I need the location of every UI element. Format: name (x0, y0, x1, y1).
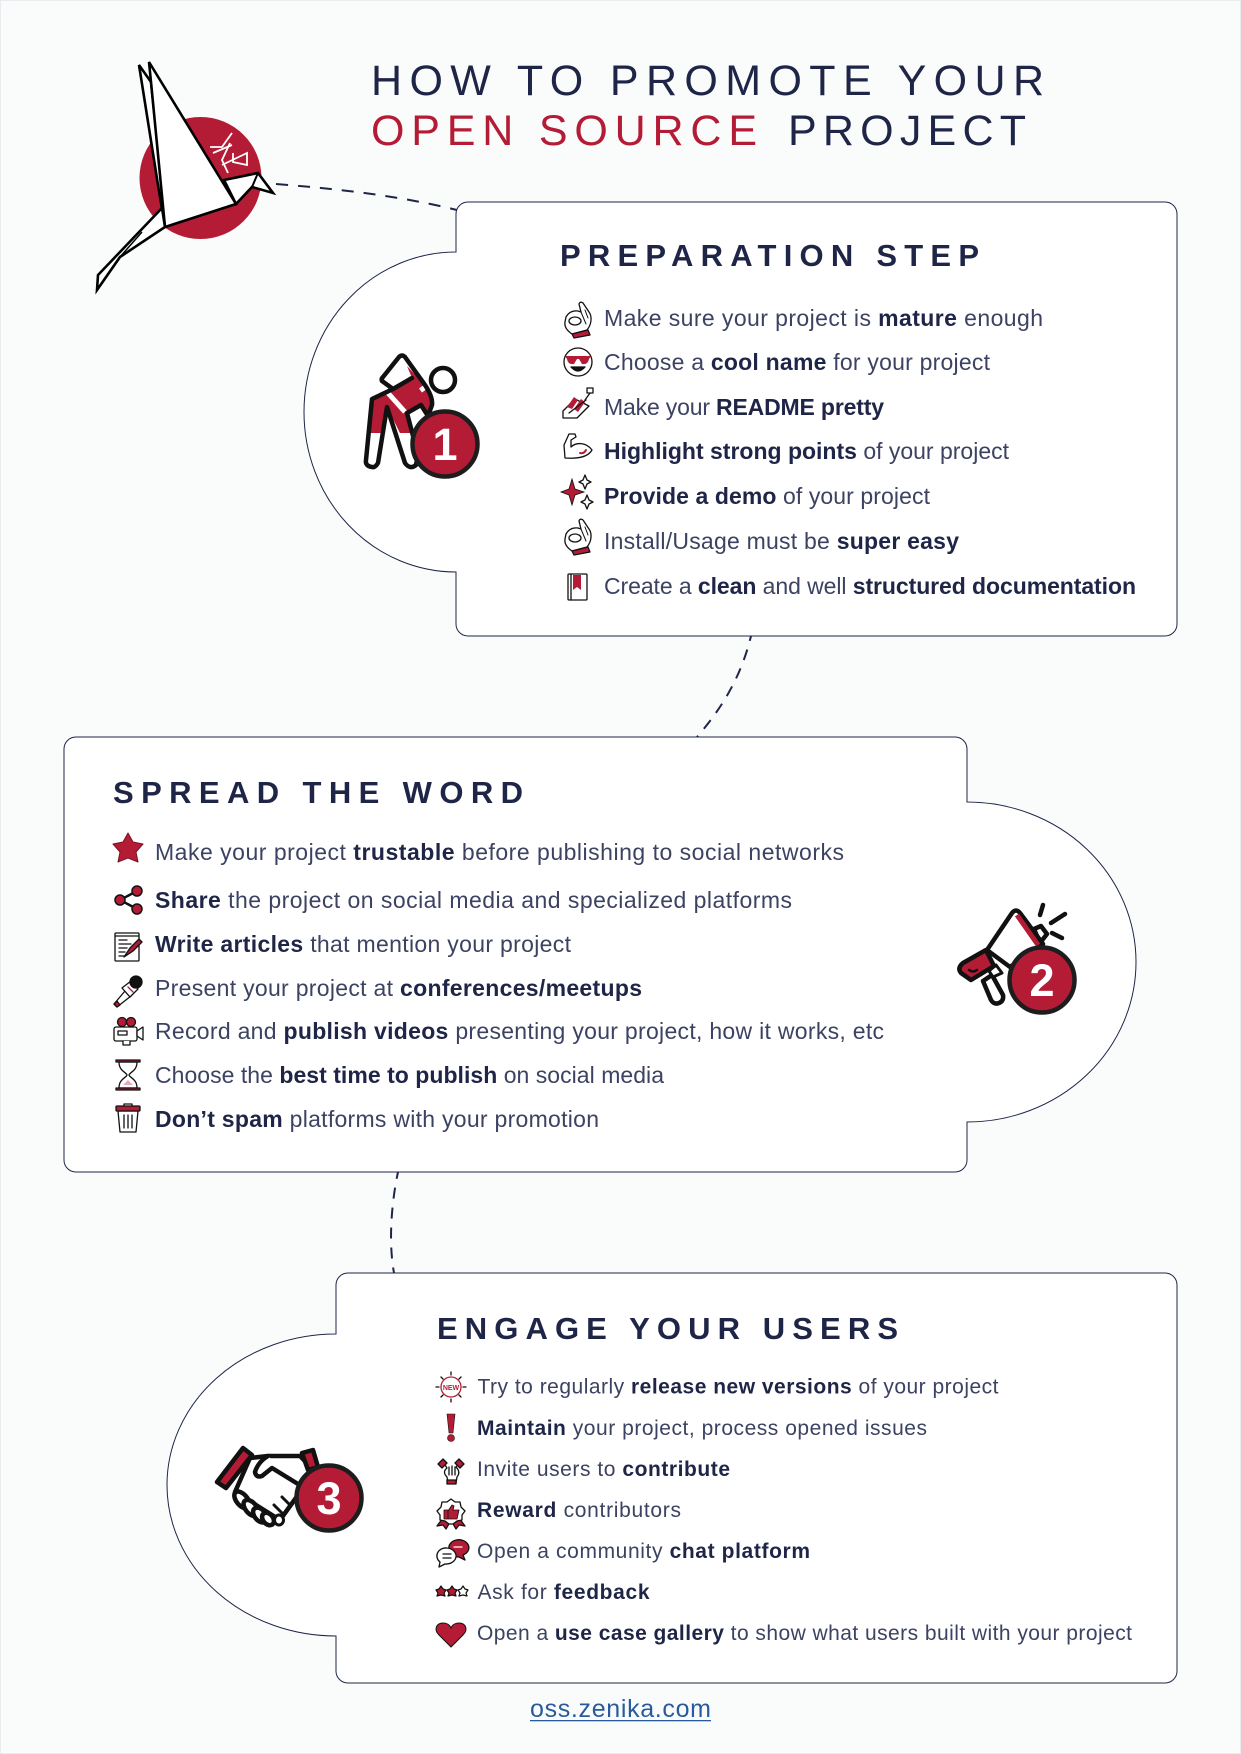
item: mature: Make sure your project is mature enough (604, 305, 1043, 331)
item: documentation: Create a clean and well structured documentation (604, 573, 1136, 599)
title (371, 57, 1044, 155)
item: new versions: Try to regularly release new versions of your project (478, 1376, 999, 1398)
connector: logo to preparation (276, 184, 457, 210)
heading: ENGAGE YOUR USERS (437, 1311, 898, 1346)
footer link: oss.zenika.com (530, 1695, 711, 1723)
illustration: megaphone with number 2 (959, 905, 1074, 1012)
heading: PREPARATION STEP (560, 238, 979, 273)
item: easy install (565, 519, 959, 555)
item: feedback: Ask for feedback (478, 1581, 650, 1604)
item: articles: Write articles that mention your project (155, 931, 572, 957)
item: demo: Provide a demo of your project (604, 483, 931, 509)
panel: engage your users (167, 1273, 1177, 1683)
item: best time: Choose the best time to publish on social media (155, 1062, 664, 1088)
item: contribute: Invite users to contribute (477, 1458, 730, 1481)
panel: preparation step (304, 202, 1177, 636)
illustration: stretching person with number 1: 1 (432, 419, 458, 470)
item: new versions: NEW (443, 1385, 460, 1392)
item: share: Share the project on social media and specialized platforms (155, 887, 792, 913)
panel: spread the word (64, 737, 1136, 1172)
item: videos: Record and publish videos presenting your project, how it works, etc (155, 1018, 884, 1044)
connector: preparation to spread (697, 636, 751, 737)
logo: origami bird (97, 62, 273, 290)
connector: spread to engage (391, 1172, 398, 1273)
item: chat: Open a community chat platform (477, 1540, 810, 1563)
illustration: stretching person with number 1 (366, 356, 478, 476)
heading: SPREAD THE WORD (113, 775, 523, 810)
panel outline (304, 202, 1177, 636)
item: gallery: Open a use case gallery to show what users built with your project (477, 1622, 1132, 1645)
item: easy install: Install/Usage must be super easy (604, 528, 959, 554)
item: maintain: Maintain your project, process opened issues (477, 1417, 927, 1440)
illustration: handshake with number 3: 3 (316, 1473, 342, 1524)
item: don't spam: Don’t spam platforms with your promotion (155, 1106, 599, 1132)
item: readme: Make your README pretty (604, 394, 884, 420)
item: conferences: Present your project at conferences/meetups (155, 975, 642, 1001)
item: demo (561, 475, 931, 509)
item: reward: Reward contributors (477, 1499, 681, 1522)
illustration: megaphone with number 2: 2 (1029, 955, 1055, 1006)
panel outline (167, 1273, 1177, 1683)
title: OPEN SOURCE (371, 107, 757, 155)
item: reward (437, 1499, 681, 1529)
item: strong points: Highlight strong points of your project (604, 438, 1010, 464)
title: PROJECT (788, 107, 1026, 155)
title: HOW TO PROMOTE YOUR (371, 57, 1044, 105)
panel outline (64, 737, 1136, 1172)
illustration: handshake with number 3 (217, 1448, 362, 1530)
item: cool name: Choose a cool name for your project (604, 349, 991, 375)
item: trustable: Make your project trustable before publishing to social networks (155, 839, 844, 865)
item: mature (565, 302, 1043, 338)
